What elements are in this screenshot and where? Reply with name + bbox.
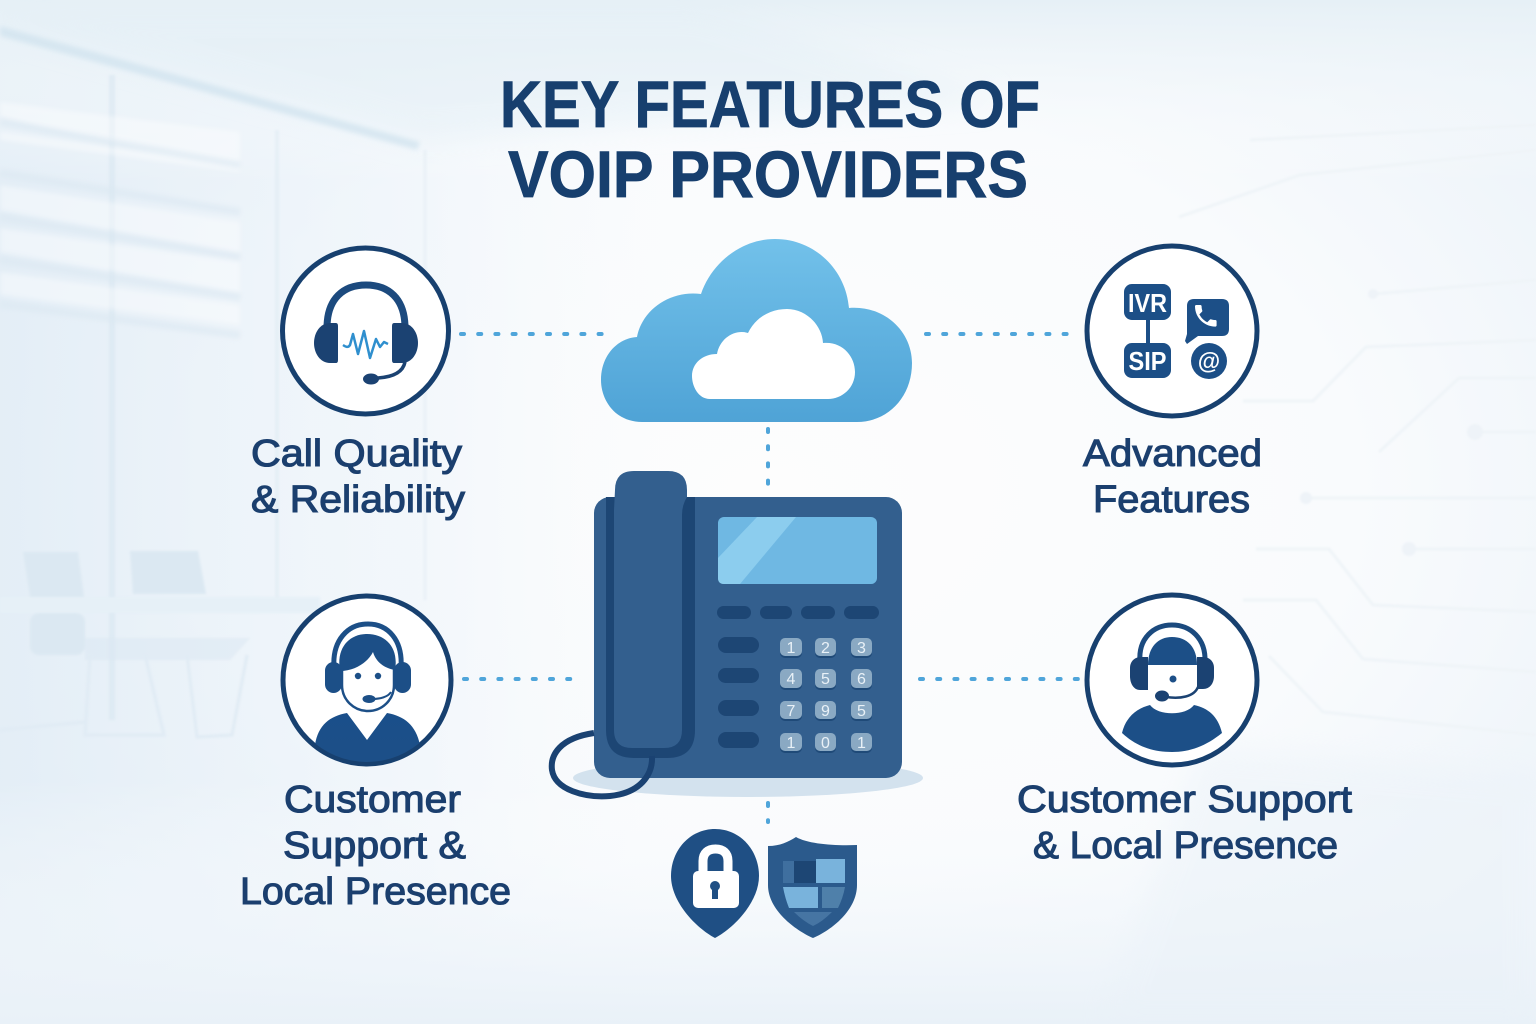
icon: female support agent [283, 596, 451, 770]
label: customer support left [240, 779, 511, 913]
label: customer support right [1017, 779, 1352, 867]
phone keypad: 5 [857, 703, 866, 720]
icon: padlock shield [671, 829, 759, 938]
panel: advanced features [1083, 246, 1262, 521]
icon: firewall shield [768, 837, 857, 938]
phone keypad: 7 [787, 703, 796, 720]
panel: customer support left [240, 596, 511, 913]
phone keypad: 2 [821, 640, 830, 657]
label: customer support left: Local Presence [240, 871, 511, 913]
phone keypad: 4 [787, 671, 796, 688]
title: VOIP PROVIDERS [508, 137, 1028, 211]
icon: headset with waveform [282, 248, 448, 414]
label: call quality: Call Quality [251, 433, 462, 475]
panel: security icons [671, 829, 857, 938]
phone keypad: 0 [821, 735, 830, 752]
label: customer support right: & Local Presence [1033, 825, 1338, 867]
label: customer support left: Customer [284, 779, 461, 821]
panel: customer support right [1017, 595, 1352, 867]
icon: desk phone [552, 471, 923, 797]
phone keypad: 5 [821, 671, 830, 688]
icon: cloud [601, 239, 912, 422]
phone keypad: 6 [857, 671, 866, 688]
phone keypad: 3 [857, 640, 866, 657]
label: customer support left: Support & [283, 825, 466, 867]
label: advanced features: Features [1093, 479, 1250, 521]
label: call quality: & Reliability [251, 479, 465, 521]
phone function buttons [717, 606, 879, 748]
phone keypad: 1 [787, 735, 796, 752]
icon: IVR SIP chat email: @ [1198, 348, 1220, 374]
icon: male support agent [1087, 595, 1257, 765]
icon: IVR SIP chat email: SIP [1128, 346, 1166, 376]
title [500, 67, 1040, 211]
phone keypad: 1 [857, 735, 866, 752]
phone keypad: 1 [787, 640, 796, 657]
label: call quality [251, 433, 465, 521]
phone keypad [780, 638, 872, 753]
label: advanced features [1083, 433, 1262, 521]
icon: IVR SIP chat email: IVR [1128, 288, 1167, 318]
icon: IVR SIP chat email [1087, 246, 1257, 416]
title: KEY FEATURES OF [500, 67, 1040, 141]
phone screen [718, 517, 877, 584]
dotted connectors [461, 334, 1083, 822]
panel: call quality [251, 248, 465, 521]
label: customer support right: Customer Support [1017, 779, 1352, 821]
phone keypad: 9 [821, 703, 830, 720]
label: advanced features: Advanced [1083, 433, 1262, 475]
